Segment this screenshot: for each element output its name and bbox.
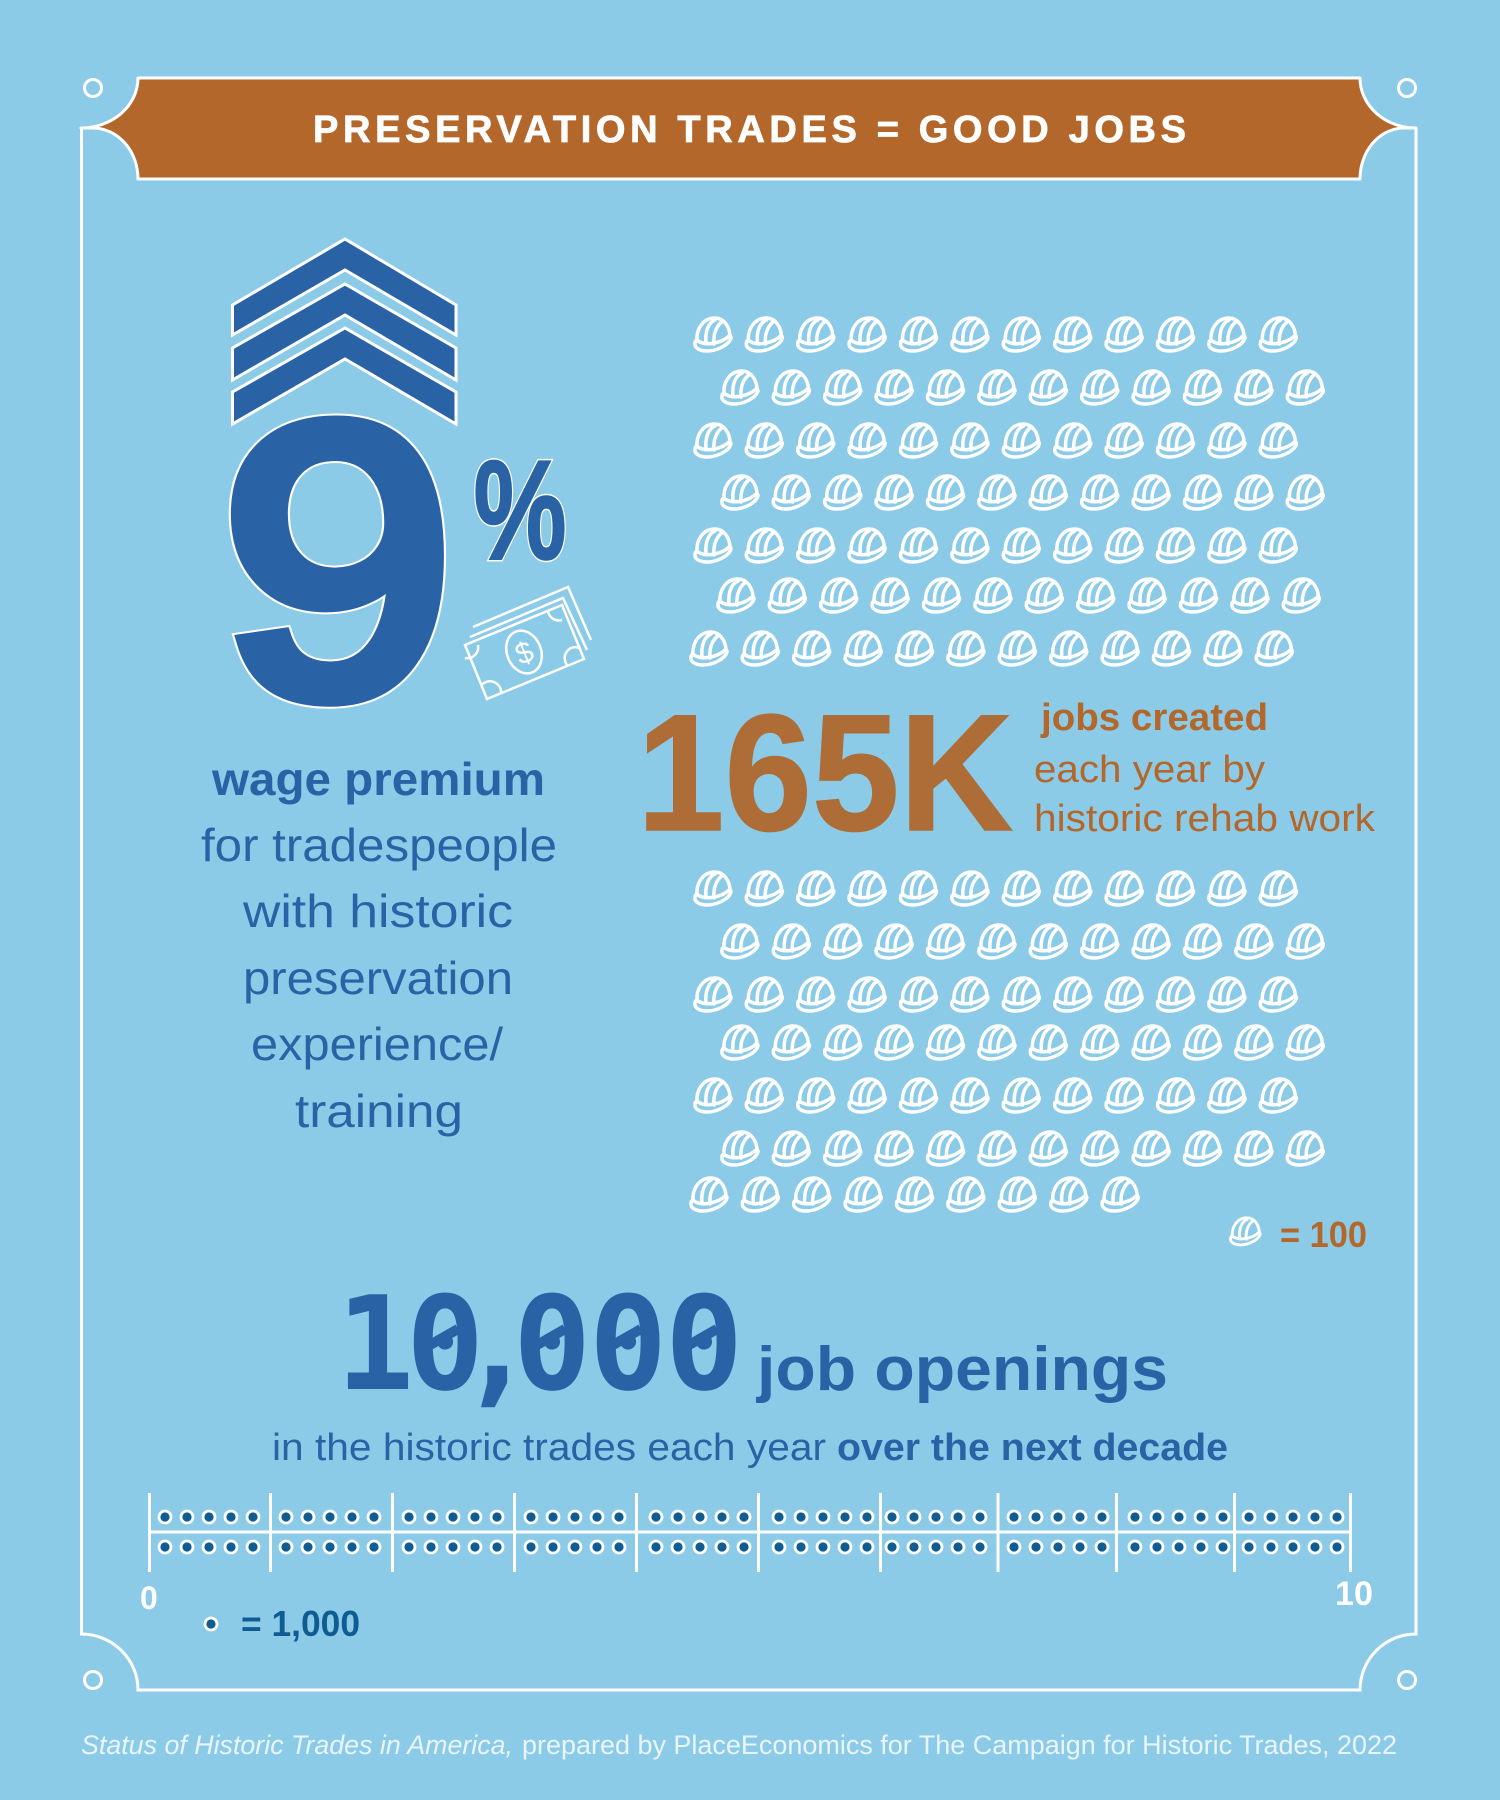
big number: 165K jobs: each year by [1034, 749, 1265, 791]
big number: 165K jobs [637, 681, 1376, 866]
headline: 10,000 job openings [336, 1268, 1168, 1420]
source credit: Status of Historic Trades in America, [81, 1730, 513, 1760]
subheading: over the next decade: over the next decade [837, 1427, 1228, 1469]
icon: dollar bills: $ [511, 635, 539, 672]
big number: 165K jobs: jobs created [1040, 697, 1268, 739]
icon: rank chevrons [232, 239, 456, 424]
text: wage premium description: experience/ [251, 1018, 503, 1070]
big number: 9 percent [221, 345, 566, 776]
legend: hard hat equals 100: = 100 [1280, 1214, 1367, 1255]
headline: 10,000 job openings: 10,000 [336, 1268, 743, 1420]
big number: 165K jobs: historic rehab work [1034, 798, 1376, 840]
text: wage premium description [201, 753, 557, 1137]
dot scale chart: 0 to 10: 10 [1335, 1575, 1373, 1613]
text: wage premium description: training [295, 1085, 463, 1137]
dot scale chart: 0 to 10: 0 [140, 1580, 158, 1616]
icon: dollar bills [465, 587, 591, 699]
pictogram: hard hats upper block [691, 318, 1323, 665]
text: wage premium description: for tradespeople [201, 819, 557, 871]
pictogram: hard hats lower block [691, 872, 1323, 1211]
big number: 165K jobs: 165K [637, 681, 1013, 866]
text: wage premium description: wage premium [211, 753, 545, 805]
legend: hard hat equals 100 [1231, 1214, 1367, 1255]
decorative frame [82, 80, 1416, 1690]
dot scale chart: 0 to 10 [140, 1493, 1373, 1616]
headline: 10,000 job openings: job openings [756, 1335, 1168, 1404]
title banner: PRESERVATION TRADES = GOOD JOBS [313, 109, 1186, 151]
source credit: prepared by PlaceEconomics for The Campaign for Historic Trades, 2022 [522, 1730, 1397, 1760]
text: wage premium description: with historic [242, 885, 513, 937]
legend: dot equals 1,000: = 1,000 [241, 1603, 360, 1644]
text: wage premium description: preservation [243, 952, 513, 1004]
subheading: over the next decade: in the historic trades each year [272, 1427, 826, 1469]
source credit [81, 1730, 1397, 1760]
title banner [81, 78, 1416, 179]
subheading: over the next decade [272, 1427, 1228, 1469]
